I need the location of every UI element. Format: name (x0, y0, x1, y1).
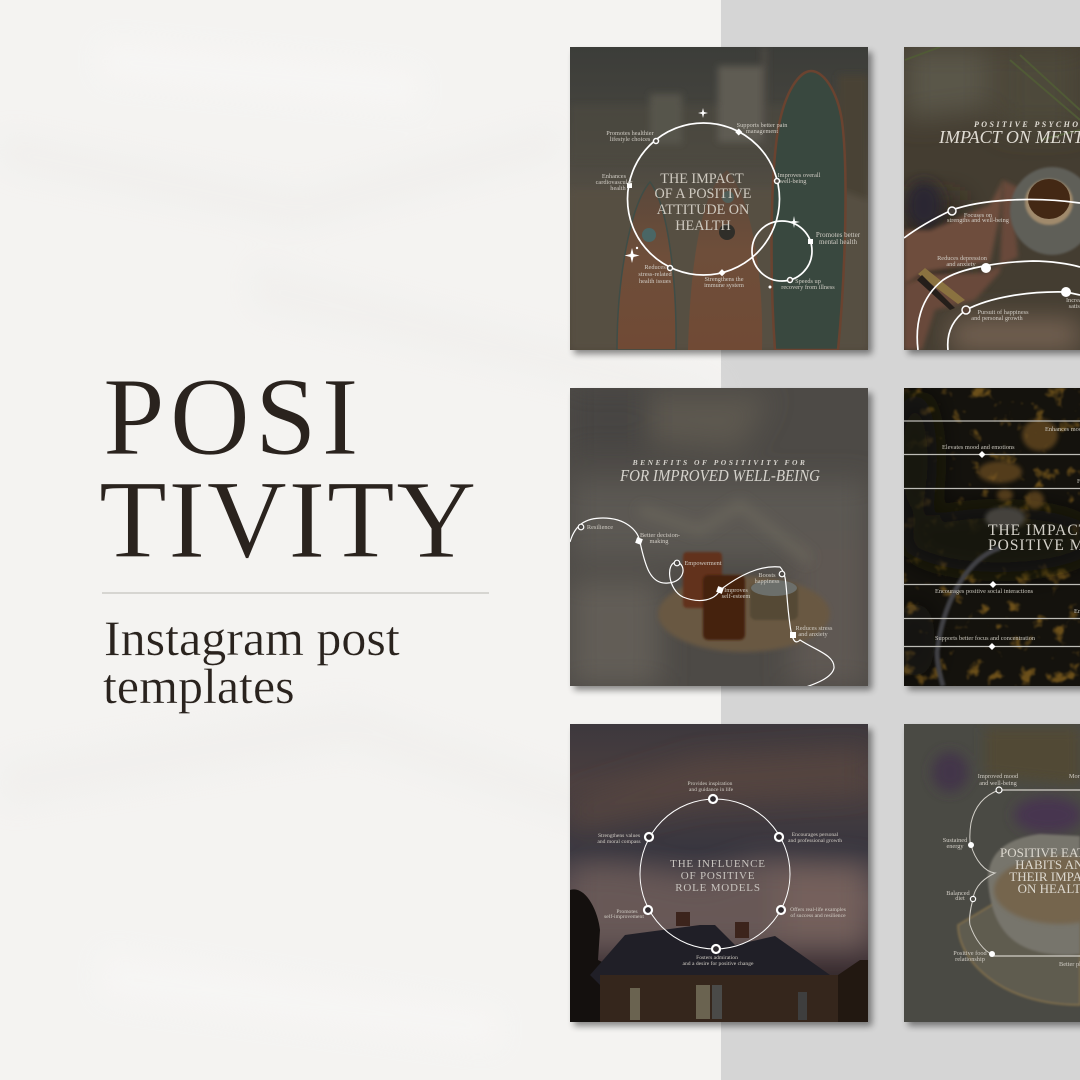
labels (596, 122, 861, 291)
labels: happiness (755, 578, 780, 585)
heading (655, 174, 751, 230)
labels: Elevates mood and emotions (942, 444, 1015, 451)
labels: Balanced (946, 890, 971, 897)
labels: and well-being (979, 780, 1018, 787)
labels: Encourages personal (792, 832, 839, 838)
labels: Pursuit of happiness (977, 309, 1029, 316)
title: POSITIVITY: POSI (103, 356, 364, 479)
labels: Reduces (644, 264, 666, 271)
labels: Promotes (616, 909, 638, 915)
labels: mental health (819, 238, 857, 246)
heading (670, 860, 764, 891)
diagram: winding line (570, 518, 834, 688)
labels: Sustained (943, 837, 968, 844)
heading: OF A POSITIVE (655, 186, 751, 202)
panel: impact of a positive attitude on health (570, 47, 868, 350)
heading: THE IMPACT (660, 171, 744, 187)
labels: and anxiety (946, 261, 976, 268)
labels: and professional growth (788, 837, 842, 844)
labels: Boosts (758, 572, 776, 579)
labels: Positive food (953, 950, 988, 957)
card shadows (574, 52, 1080, 1026)
labels: self-improvement (604, 913, 644, 920)
diagram: two rings (627, 123, 813, 282)
lines and dots (904, 421, 1080, 650)
labels: health (610, 185, 627, 192)
photo: hand holding coffee cup (904, 47, 1080, 350)
labels: and anxiety (798, 631, 828, 638)
labels: Reduces depression (937, 255, 988, 262)
labels: cardiovascular (596, 179, 633, 186)
photo: candles on tray (570, 388, 868, 686)
divider (102, 592, 489, 594)
labels: well-being (780, 178, 807, 185)
labels: Fosters admiration (696, 955, 738, 961)
subtitle: Instagram post (104, 610, 400, 666)
labels: Resilience (587, 524, 613, 531)
labels: Supports better pain (737, 122, 788, 129)
labels: Focuses on (964, 212, 993, 219)
title: POSITIVITY: TIVITY (99, 459, 478, 582)
labels: Strengthens values (598, 833, 640, 839)
labels: Supports better focus and concentration (935, 635, 1036, 642)
photo: aerial forest (893, 388, 1080, 686)
labels: energy (946, 843, 964, 850)
labels: self-esteem (722, 593, 750, 600)
labels: Improved mood (978, 773, 1019, 780)
labels: Empowerment (684, 560, 722, 567)
heading: HEALTH (675, 218, 731, 234)
icon: sparkles (624, 108, 800, 288)
labels: making (650, 538, 669, 545)
heading (620, 460, 820, 482)
labels: diet (955, 895, 965, 902)
labels: Encourages positive social interactions (935, 588, 1034, 595)
subtitle (103, 610, 400, 714)
labels: recovery from illness (781, 284, 835, 291)
labels: management (746, 128, 778, 135)
labels: Promotes better (816, 231, 861, 239)
labels: and personal growth (971, 315, 1024, 322)
panel: benefits of positivity (570, 388, 868, 688)
panel: the impact of positive mindset (893, 388, 1080, 686)
panel: positive psychology impact on mental health (904, 47, 1080, 350)
labels: immune system (704, 282, 744, 289)
labels: Strengthens the (704, 276, 744, 283)
heading: ROLE MODELS (675, 882, 761, 894)
panel: positive eating habits (904, 724, 1080, 1022)
title: POSITIVITY (99, 356, 478, 582)
subtitle: templates (103, 658, 295, 714)
heading: THE INFLUENCE (670, 858, 766, 870)
labels: Promotes healthier (606, 130, 655, 137)
labels: and moral compass (597, 839, 641, 845)
labels: Provides inspiration (688, 781, 733, 787)
labels (937, 212, 1080, 322)
labels: Reduces stress (796, 625, 833, 632)
labels (943, 773, 1080, 968)
heading: FOR IMPROVED WELL-BEING (619, 466, 820, 485)
labels (935, 426, 1080, 642)
labels: Offers real-life examples (790, 906, 846, 913)
labels: strengths and well-being (947, 217, 1010, 224)
diagram: ring with nodes (640, 795, 790, 953)
labels: health issues (639, 278, 672, 285)
labels (587, 524, 833, 638)
labels: lifestyle choices (610, 136, 651, 143)
labels: and a desire for positive change (683, 960, 754, 967)
labels: relationship (955, 956, 985, 963)
diagram: bracket line (968, 787, 1080, 957)
photo: coffee cup and flowers (904, 724, 1080, 1022)
heading: BENEFITS OF POSITIVITY FOR (632, 458, 807, 467)
heading (1000, 848, 1080, 893)
labels: Speeds up (795, 278, 821, 285)
labels: Improves overall (778, 172, 821, 179)
heading (938, 122, 1080, 143)
labels: of success and resilience (790, 912, 846, 919)
labels: and guidance in life (689, 786, 734, 793)
heading (988, 524, 1080, 550)
panel: influence of positive role models (570, 724, 868, 1022)
labels (597, 781, 846, 967)
photo: beach with surfboards (570, 47, 868, 350)
diagram: arcs (904, 199, 1080, 350)
labels: Better decision- (640, 532, 680, 539)
heading: OF POSITIVE (681, 870, 755, 882)
photo: house at dusk (570, 724, 868, 1022)
heading: ATTITUDE ON (657, 202, 749, 218)
labels: Enhances (602, 173, 627, 180)
labels: Improves (724, 587, 748, 594)
labels: stress-related (638, 271, 672, 278)
